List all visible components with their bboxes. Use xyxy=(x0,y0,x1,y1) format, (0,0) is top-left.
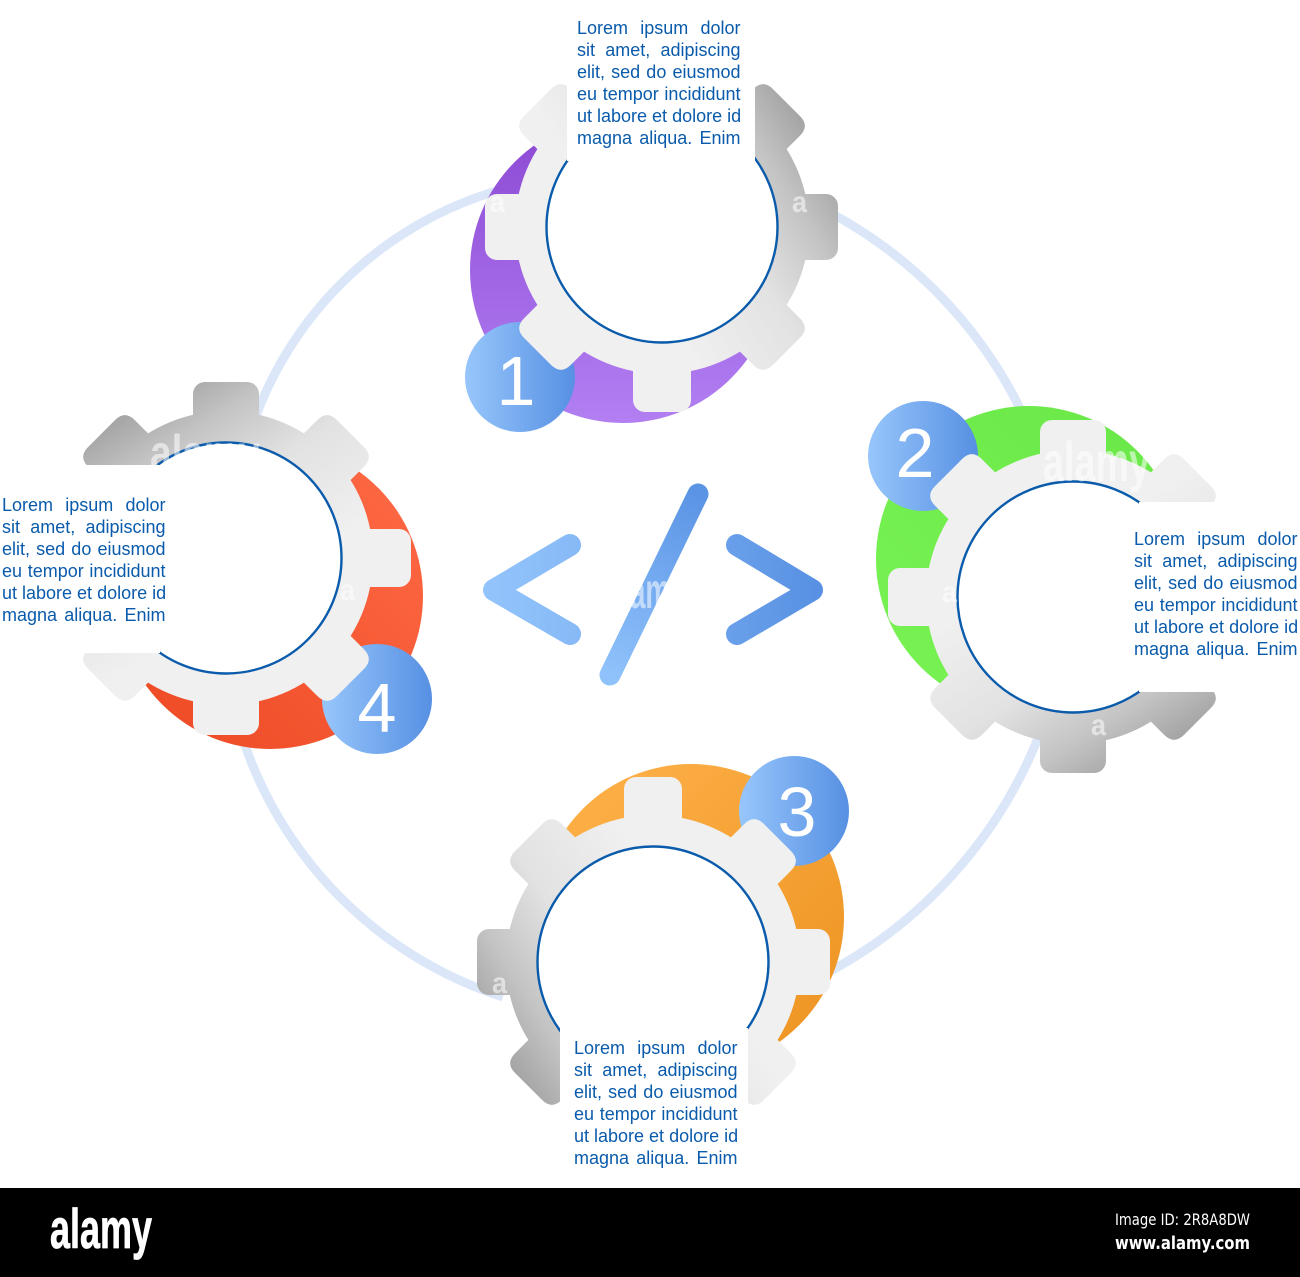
text block: step 2: sit amet, adipiscing xyxy=(1134,551,1298,571)
watermark xyxy=(150,186,1150,1000)
watermark: a xyxy=(492,967,507,1000)
number 1: 1 xyxy=(497,342,535,420)
text block: step 1: Lorem ipsum dolor xyxy=(577,18,740,38)
text block: step 4: eu tempor incididunt xyxy=(2,561,166,581)
text block: step 3: magna aliqua. Enim xyxy=(574,1148,738,1168)
site url: www.alamy.com xyxy=(1115,1233,1250,1254)
panel: gear step 4 xyxy=(36,382,432,754)
watermark: a xyxy=(792,186,807,219)
text block: step 2: Lorem ipsum dolor xyxy=(1134,529,1298,549)
number 4: 4 xyxy=(358,669,396,747)
footer bar xyxy=(0,1188,1300,1277)
text block: step 4: ut labore et dolore id xyxy=(2,583,166,603)
text block: step 4 xyxy=(2,495,166,625)
text block: step 2: ut labore et dolore id xyxy=(1134,617,1298,637)
badge circle 3 xyxy=(739,756,849,866)
panel: gear step 2 xyxy=(868,401,1263,773)
watermark: a xyxy=(490,186,505,219)
gear 1 xyxy=(485,37,838,412)
text block: step 1: elit, sed do eiusmod xyxy=(577,62,740,82)
watermark: alamy xyxy=(150,425,260,481)
text block: step 3 xyxy=(574,1038,738,1168)
text block: step 1: eu tempor incididunt xyxy=(577,84,740,104)
red disc xyxy=(117,443,423,749)
text block: step 3: eu tempor incididunt xyxy=(574,1104,738,1124)
text block: step 3: elit, sed do eiusmod xyxy=(574,1082,738,1102)
icon: code symbol xyxy=(494,494,812,675)
text block: step 2 xyxy=(1134,529,1298,659)
text block: step 4: Lorem ipsum dolor xyxy=(2,495,166,515)
text block: step 1 xyxy=(577,18,741,148)
orange disc xyxy=(538,764,844,1070)
image id: Image ID: 2R8A8DW xyxy=(1115,1210,1250,1229)
text block: step 3: ut labore et dolore id xyxy=(574,1126,738,1146)
text block: step 4: sit amet, adipiscing xyxy=(2,517,166,537)
gear 4 xyxy=(36,382,411,735)
text block: step 2: elit, sed do eiusmod xyxy=(1134,573,1298,593)
text block: step 2: eu tempor incididunt xyxy=(1134,595,1298,615)
gear 2 xyxy=(888,420,1263,773)
purple disc xyxy=(470,117,776,423)
panel: gear step 3 xyxy=(477,756,849,1152)
connecting ring xyxy=(240,186,1043,997)
badge circle 1 xyxy=(465,322,575,432)
watermark: a xyxy=(1091,709,1106,742)
number 2: 2 xyxy=(896,414,934,492)
watermark: a xyxy=(942,576,957,609)
watermark: a xyxy=(340,574,355,607)
text block: step 4: elit, sed do eiusmod xyxy=(2,539,166,559)
watermark: alamy xyxy=(1043,430,1150,493)
text block: step 1: sit amet, adipiscing xyxy=(577,40,740,60)
text block: step 2: magna aliqua. Enim xyxy=(1134,639,1298,659)
panel: gear step 1 xyxy=(465,37,838,432)
text block: step 3: sit amet, adipiscing xyxy=(574,1060,738,1080)
text block: step 4: magna aliqua. Enim xyxy=(2,605,166,625)
watermark: am xyxy=(630,563,670,619)
footer logo: alamy xyxy=(50,1197,152,1260)
text block: step 3: Lorem ipsum dolor xyxy=(574,1038,738,1058)
badge circle 4 xyxy=(322,644,432,754)
gear 3 xyxy=(477,777,830,1152)
number 3: 3 xyxy=(778,773,816,851)
badge circle 2 xyxy=(868,401,978,511)
text block: step 1: ut labore et dolore id xyxy=(577,106,741,126)
text block: step 1: magna aliqua. Enim xyxy=(577,128,740,148)
green disc xyxy=(876,406,1182,712)
